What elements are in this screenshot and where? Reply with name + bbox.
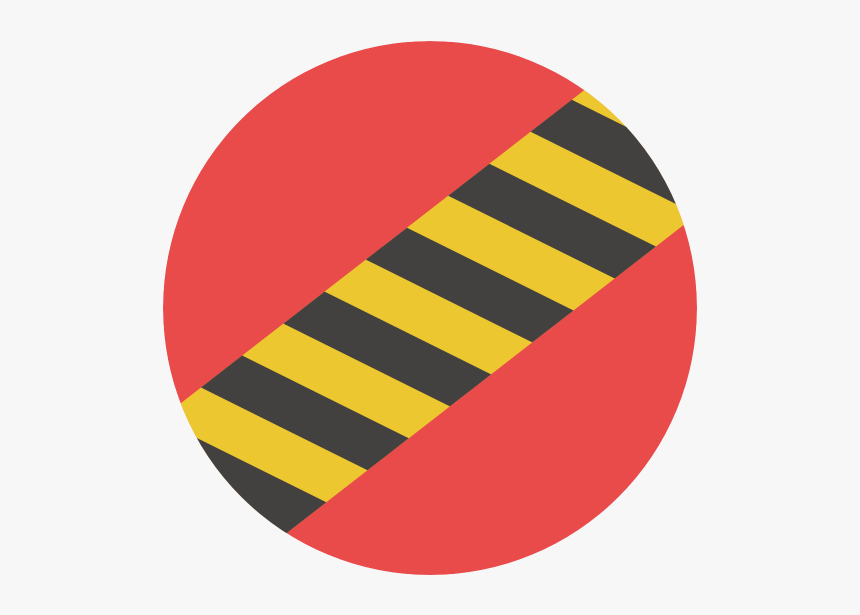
icon: hazard stripe circle bbox=[163, 41, 697, 575]
hazard band bbox=[180, 90, 684, 534]
icon: hazard circle bbox=[163, 41, 697, 575]
